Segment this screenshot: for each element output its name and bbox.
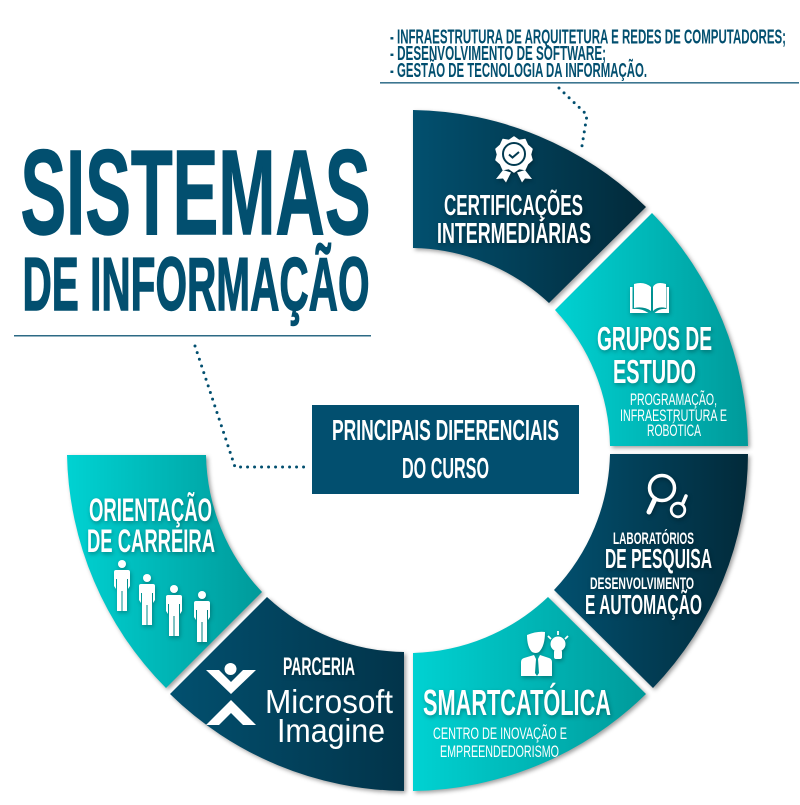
text block: course topics list: - DESENVOLVIMENTO DE SOFTWARE; [390, 42, 606, 65]
panel: principais diferenciais: PRINCIPAIS DIFERENCIAIS [332, 415, 559, 447]
icon: magnifying glasses [649, 476, 686, 517]
panel: orientação de carreira: DE CARREIRA [87, 523, 215, 559]
panel: grupos de estudo: ESTUDO [613, 354, 696, 391]
panel: certificações intermediárias: INTERMEDIÁRIAS [437, 216, 591, 250]
panel: laboratórios de pesquisa [554, 454, 748, 688]
text block: course topics list [380, 26, 799, 84]
icon: four standing people [114, 560, 210, 642]
panel: laboratórios de pesquisa: E AUTOMAÇÃO [585, 589, 702, 620]
panel: smartcatólica: EMPREENDEDORISMO [440, 742, 559, 761]
panel: grupos de estudo: PROGRAMAÇÃO, [630, 389, 717, 409]
panel: orientação de carreira [67, 455, 262, 688]
panel: smartcatólica: SMARTCATÓLICA [423, 681, 611, 723]
icon: imagine logo [206, 663, 256, 725]
panel: grupos de estudo: ROBÓTICA [647, 421, 701, 440]
panel: smartcatólica [413, 597, 646, 791]
title: Sistemas de Informação: DE INFORMAÇÃO [22, 242, 370, 326]
panel: principais diferenciais: DO CURSO [402, 453, 489, 485]
panel: certificações intermediárias: CERTIFICAÇÕES [444, 188, 583, 222]
panel: orientação de carreira: ORIENTAÇÃO [89, 492, 212, 528]
panel: laboratórios de pesquisa: DESENVOLVIMENTO [590, 574, 694, 593]
icon: person with light bulb [521, 631, 568, 676]
panel: grupos de estudo: INFRAESTRUTURA E [620, 407, 727, 425]
title: Sistemas de Informação [14, 124, 371, 336]
text: Microsoft Imagine wordmark: Microsoft [265, 683, 393, 720]
icon: open book [630, 283, 669, 313]
text: Microsoft Imagine wordmark: Imagine [277, 712, 385, 749]
panel: laboratórios de pesquisa: DE PESQUISA [605, 543, 712, 574]
panel: smartcatólica: CENTRO DE INOVAÇÃO E [433, 724, 567, 743]
text: Microsoft Imagine wordmark [265, 683, 393, 749]
panel: certificações intermediárias [413, 110, 646, 303]
title: Sistemas de Informação: SISTEMAS [20, 124, 370, 260]
panel: laboratórios de pesquisa: LABORATÓRIOS [613, 529, 694, 548]
panel: parceria microsoft imagine: PARCERIA [283, 653, 355, 681]
arrow: dotted connector from topics list to certifications [559, 88, 587, 152]
arrow: dotted connector from title to center box [195, 346, 305, 467]
icon: certification medal [496, 137, 532, 182]
panel: principais diferenciais [312, 405, 579, 494]
panel: grupos de estudo [555, 213, 748, 446]
panel: grupos de estudo: GRUPOS DE [597, 321, 712, 358]
panel: parceria microsoft imagine [170, 597, 404, 791]
